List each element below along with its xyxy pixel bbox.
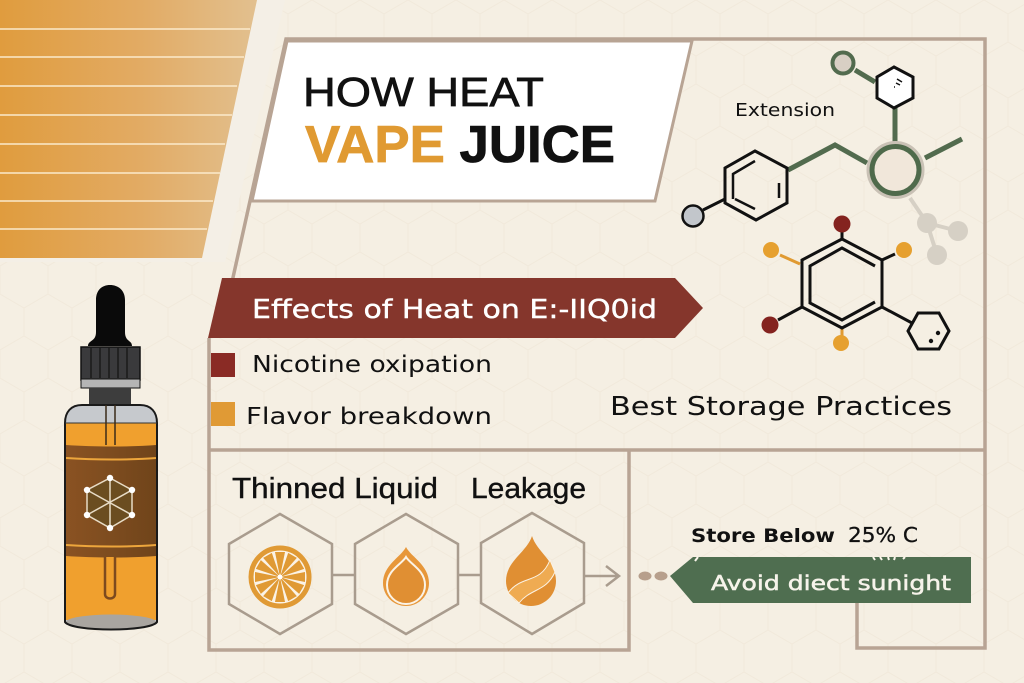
list item: nicotine: Nicotine oxipation: [252, 352, 492, 378]
title line one: HOW HEAT: [303, 69, 544, 115]
frame lines: [208, 39, 985, 650]
dropper bulb: [88, 285, 132, 346]
dropper tube: [106, 405, 115, 445]
icon: citrus slice: [251, 548, 309, 606]
bottle body: [65, 405, 157, 630]
banner: avoid sunlight: Avoid diect sunight: [711, 571, 951, 595]
title line two: VAPE JUICE: [305, 116, 615, 174]
striped heat panel: [0, 0, 257, 258]
cap: [81, 347, 140, 405]
list item: flavor: Flavor breakdown: [246, 404, 492, 430]
title panel: [252, 41, 692, 201]
label: leakage: Leakage: [471, 473, 586, 505]
icon: swirl drop: [506, 536, 556, 606]
molecule diagram: lower: [762, 216, 949, 351]
icon row: [229, 513, 619, 634]
text: store below: Store Below: [691, 525, 835, 547]
molecule diagram: upper: [682, 52, 968, 265]
label molecule: [84, 475, 135, 531]
icon: dropper bottle: [65, 285, 157, 630]
banner: effects of heat: [208, 278, 703, 338]
label: thinned liquid: Thinned Liquid: [232, 473, 438, 505]
text: store below: [691, 523, 918, 547]
connector dots: [638, 572, 668, 580]
list item: flavor: [211, 402, 492, 430]
banner: avoid sunlight: [670, 557, 971, 603]
icon: ring drop: [383, 547, 429, 606]
text: store below: 25% C: [848, 523, 918, 547]
banner: effects of heat: Effects of Heat on E:-IIQ0id: [252, 295, 657, 325]
heading: storage: Best Storage Practices: [610, 392, 952, 422]
label: extension: Extension: [735, 100, 835, 121]
